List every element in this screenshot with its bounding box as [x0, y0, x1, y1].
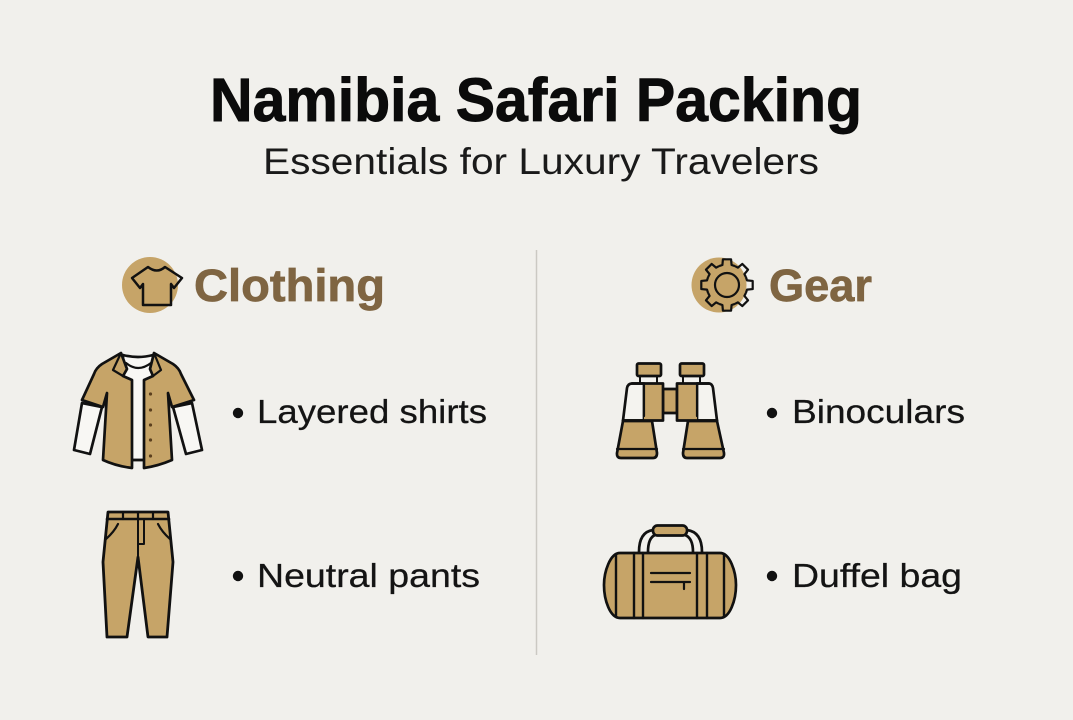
heading: gear: Gear	[769, 260, 872, 311]
icon: duffel bag	[604, 526, 736, 618]
gear item: binoculars	[617, 364, 965, 458]
icon: pants	[103, 512, 173, 637]
label: binoculars: Binoculars	[792, 393, 965, 430]
icon: gear badge	[692, 258, 753, 312]
bullet	[767, 571, 777, 581]
clothing item: neutral pants	[103, 512, 480, 637]
bullet	[767, 408, 777, 418]
bullet	[233, 408, 243, 418]
icon: binoculars	[617, 364, 724, 458]
bullet	[233, 571, 243, 581]
label: duffel bag: Duffel bag	[792, 557, 962, 594]
title: Namibia Safari Packing	[210, 66, 862, 134]
heading: clothing: Clothing	[194, 260, 385, 311]
panel: clothing	[74, 257, 487, 637]
label: layered shirts: Layered shirts	[257, 393, 487, 430]
gear heading with icon	[692, 258, 872, 312]
clothing item: layered shirts	[74, 353, 487, 468]
gear item: duffel bag	[604, 526, 962, 618]
panel: gear	[604, 258, 965, 618]
icon: layered shirt	[74, 353, 202, 468]
label: neutral pants: Neutral pants	[257, 557, 480, 594]
subtitle: Essentials for Luxury Travelers	[263, 141, 819, 182]
clothing heading with icon	[122, 257, 385, 313]
icon: t-shirt badge	[122, 257, 182, 313]
